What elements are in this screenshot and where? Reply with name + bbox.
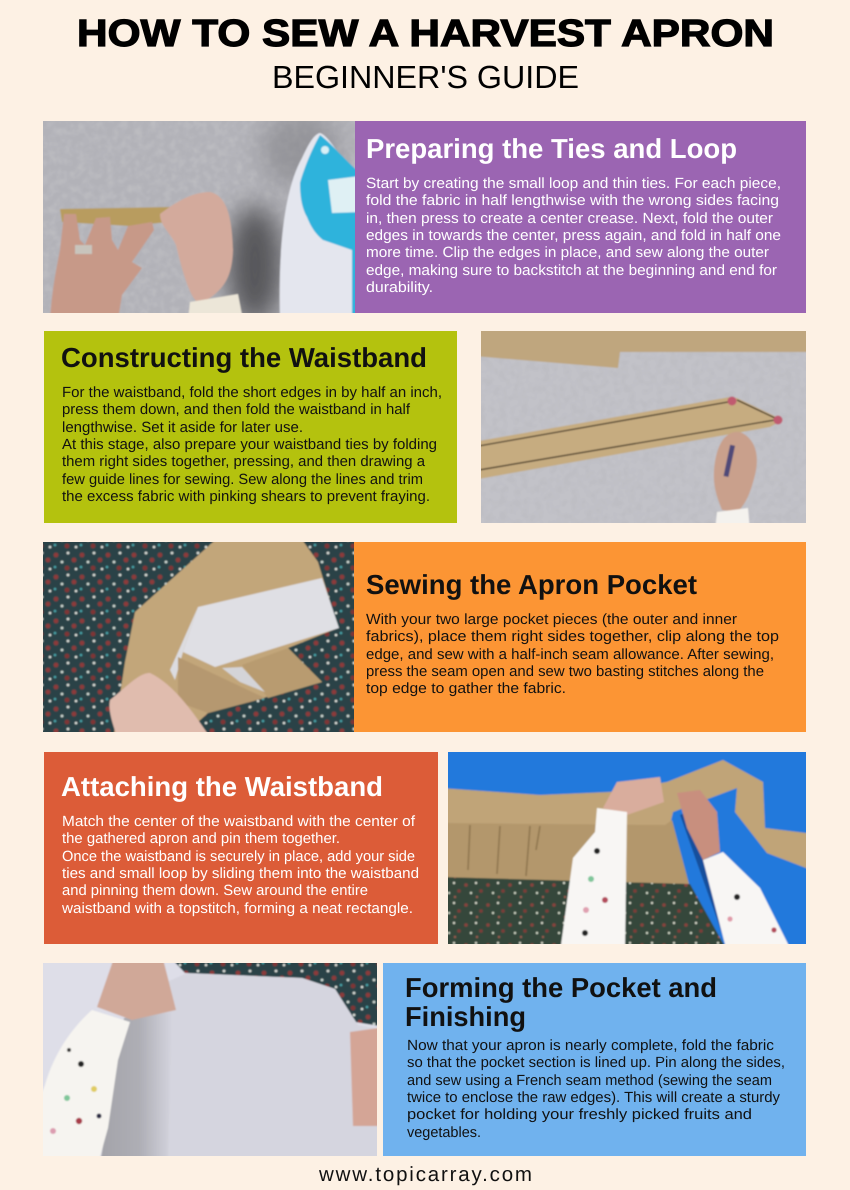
heading [405,972,717,1032]
body text: vegetables. [407,1125,481,1141]
title: BEGINNER'S GUIDE [272,59,579,95]
body text: more time. Clip the edges in place, and sew along the outer [366,245,769,261]
body text [366,612,779,697]
body text: waistband with a topstitch, forming a neat rectangle. [61,901,413,917]
body text: At this stage, also prepare your waistband ties by folding [62,437,437,453]
body text: ties and small loop by sliding them into the waistband [62,866,419,882]
panel: sewing the apron pocket [35,534,806,740]
heading: Sewing the Apron Pocket [366,569,697,600]
body text: durability. [366,280,433,296]
body text: With your two large pocket pieces (the outer and inner [366,612,737,628]
panel background: green [44,331,457,523]
body text [407,1038,785,1141]
body text [61,814,419,917]
photo: folding the apron lining [43,963,377,1156]
body text: pocket for holding your freshly picked fruits and [407,1107,752,1123]
body text: edge, making sure to backstitch at the beginning and end for [366,263,777,279]
body text: edge, and sew with a half-inch seam allowance. After sewing, [366,647,774,663]
panel background: orange [354,542,806,732]
panel: attaching the waistband [44,744,814,952]
heading: Finishing [405,1001,526,1032]
body text: Now that your apron is nearly complete, fold the fabric [407,1038,775,1054]
footer url: www.topicarray.com [318,1163,532,1186]
photo: pinning the waistband on the apron [448,752,806,944]
body text: and sew using a French seam method (sewing the seam [407,1073,772,1089]
body text: Start by creating the small loop and thin ties. For each piece, [366,176,781,192]
heading: Constructing the Waistband [61,342,427,373]
body text: Once the waistband is securely in place, add your side [62,849,415,865]
panel: preparing the ties and loop [43,121,806,313]
panel: constructing the waistband [44,323,814,531]
title [77,13,774,95]
body text: so that the pocket section is lined up. Pin along the sides, [407,1055,785,1071]
body text: in, then press to create a center crease. Next, fold the outer [366,211,773,227]
body text: edges in towards the center, press again, and fold in half one [366,228,781,244]
body text: the gathered apron and pin them together. [62,831,340,847]
photo: pocket pieces folded on print fabric [43,542,354,732]
body text: lengthwise. Set it aside for later use. [62,420,303,436]
body text [366,176,781,296]
panel: forming the pocket and finishing [35,955,806,1164]
panel background: blue [383,963,806,1156]
body text: fabrics), place them right sides together, clip along the top [366,629,779,645]
title: HOW TO SEW A HARVEST APRON [77,13,774,55]
panel background: purple [355,121,806,313]
heading: Preparing the Ties and Loop [366,133,737,164]
body text: Match the center of the waistband with the center of [62,814,416,830]
body text: them right sides together, pressing, and then drawing a [62,454,426,470]
photo: hands folding strip beside iron [43,121,355,313]
body text [62,385,442,505]
heading: Forming the Pocket and [405,972,717,1003]
body text: top edge to gather the fabric. [366,681,566,697]
heading: Attaching the Waistband [61,771,383,802]
body text: fold the fabric in half lengthwise with the wrong sides facing [366,193,779,209]
photo: marking stitch lines on a tie [481,331,806,523]
body text: press the seam open and sew two basting stitches along the [366,664,764,680]
body text: press them down, and then fold the waistband in half [62,402,411,418]
body text: the excess fabric with pinking shears to prevent fraying. [62,489,430,505]
body text: twice to enclose the raw edges). This will create a sturdy [407,1090,781,1106]
panel background: red-orange [44,752,438,944]
body text: few guide lines for sewing. Sew along the lines and trim [62,472,423,488]
body text: and pinning them down. Sew around the entire [62,883,368,899]
body text: For the waistband, fold the short edges in by half an inch, [62,385,442,401]
